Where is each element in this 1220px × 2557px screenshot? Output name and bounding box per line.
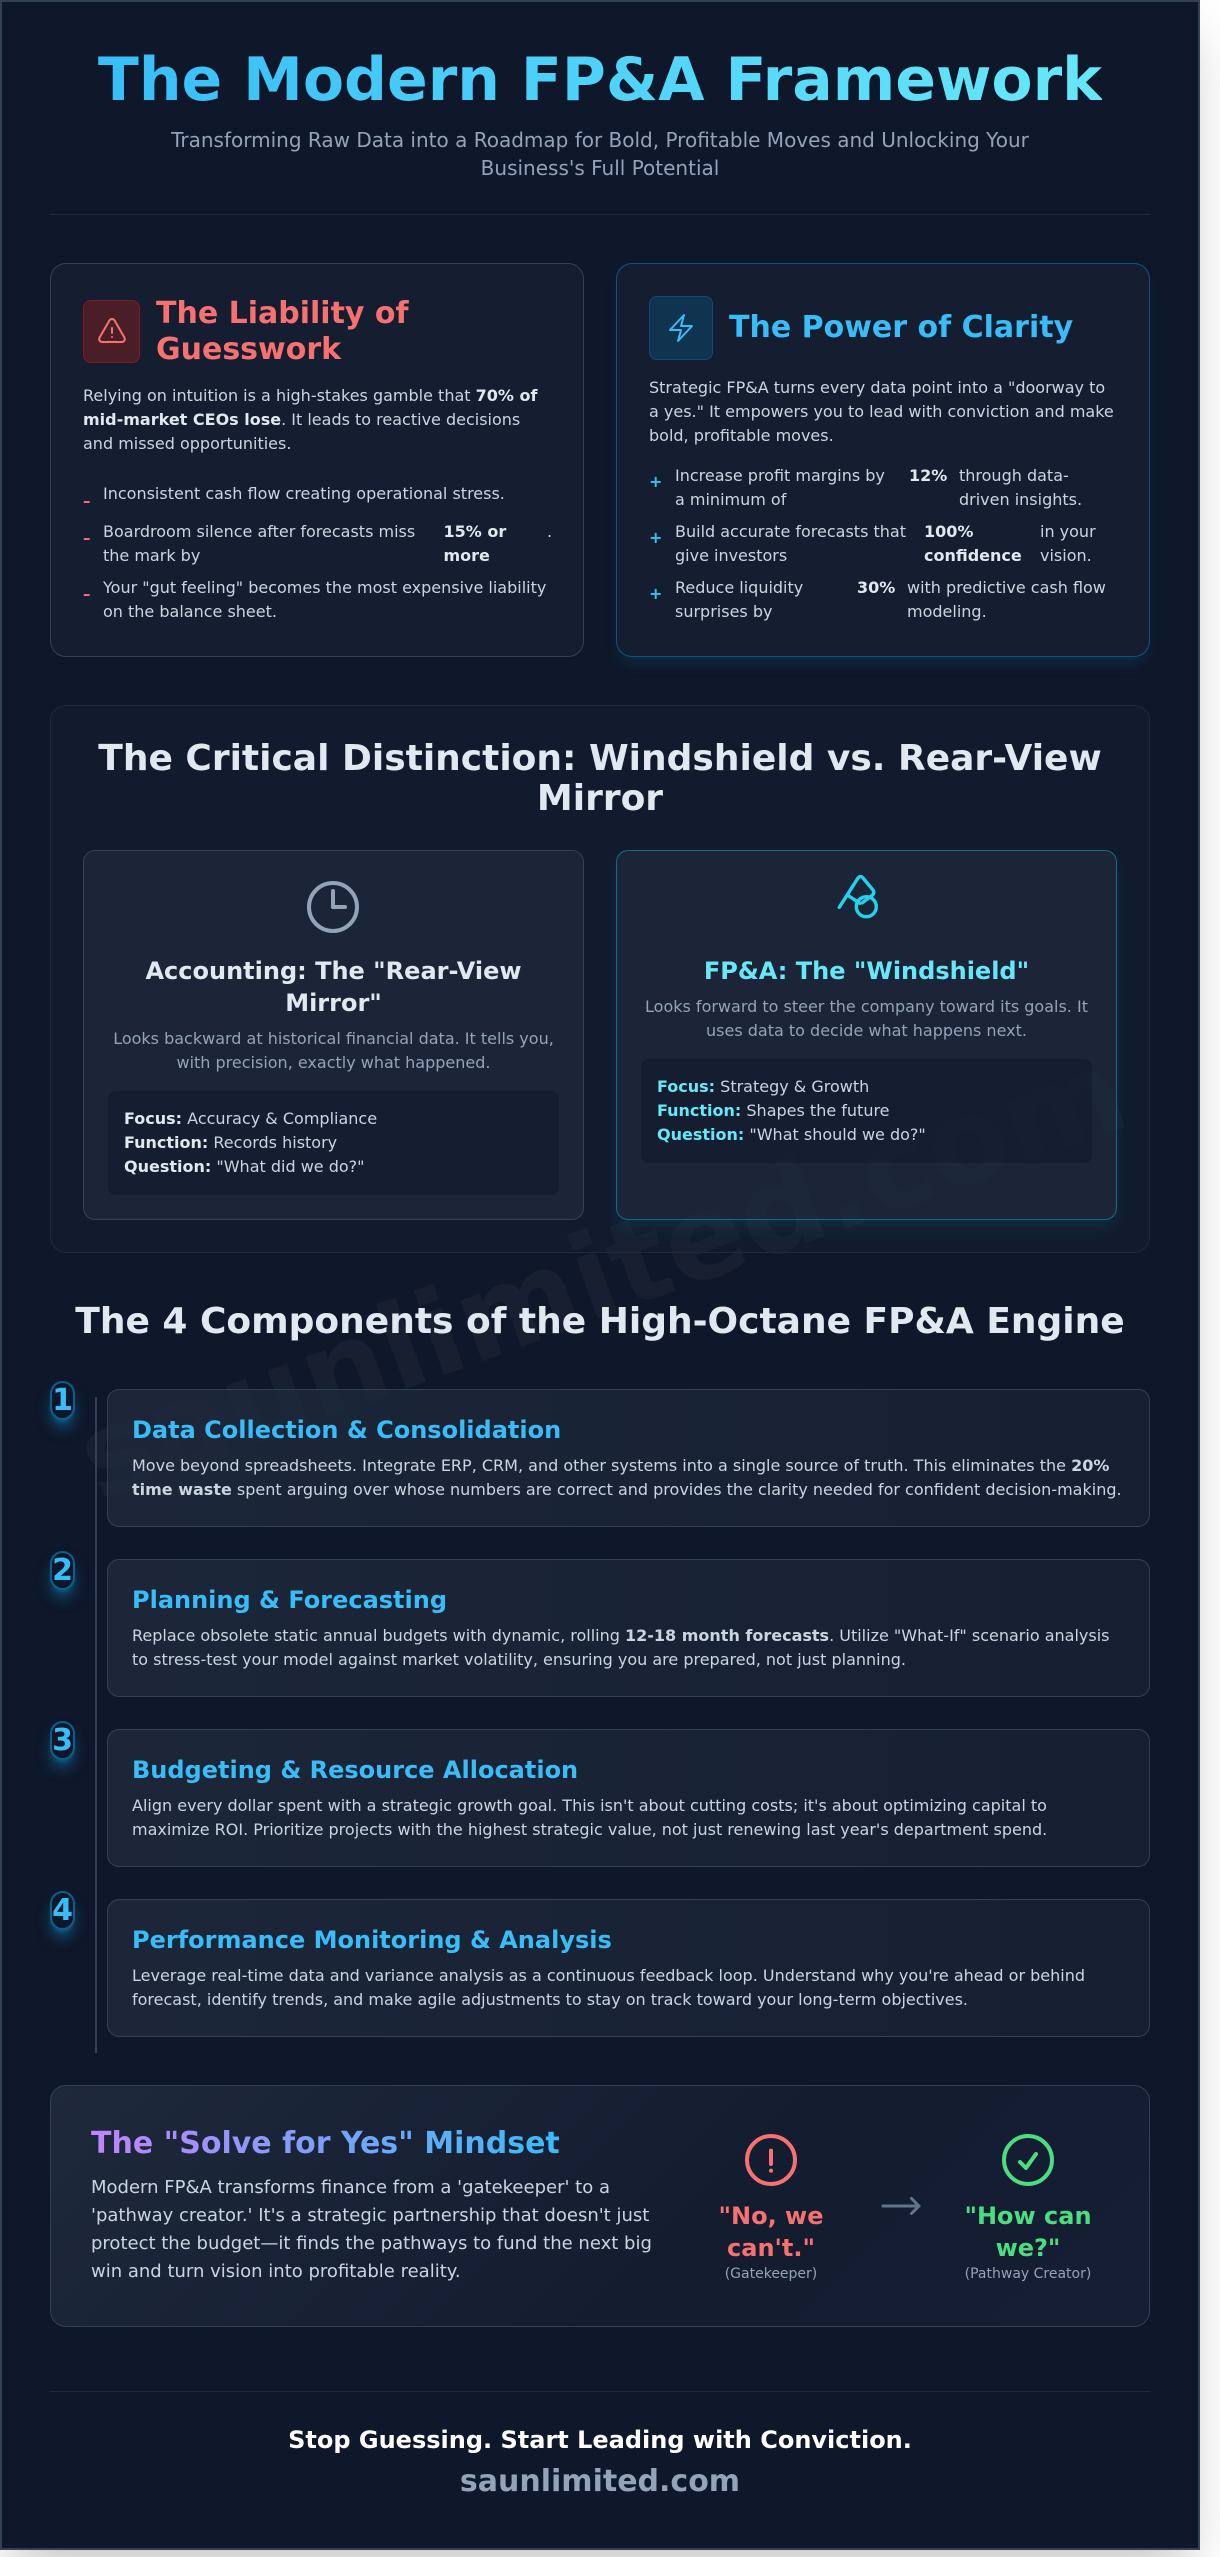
list item 1: Inconsistent cash flow creating operational stress.	[103, 484, 505, 503]
arrow	[882, 2196, 920, 2215]
panel: the liability of guesswork	[50, 263, 584, 657]
details box	[108, 1091, 559, 1195]
heading: the 4 components: The 4 Components of the High-Octane FP&A Engine	[75, 1301, 1125, 1342]
list item 2: give investors	[675, 546, 787, 565]
description	[91, 2177, 652, 2282]
card heading: Accounting: The "Rear-View	[145, 957, 522, 985]
badge 2: 2	[52, 1553, 73, 1588]
card description: uses data to decide what happens next.	[706, 1021, 1027, 1040]
component title: Planning & Forecasting	[132, 1586, 447, 1614]
quote: "No, we	[718, 2202, 824, 2230]
list item 2: Build accurate forecasts that	[675, 522, 906, 541]
component 4	[107, 1899, 1150, 2037]
heading: The Power of Clarity	[729, 310, 1073, 345]
component text: Replace obsolete static annual budgets with dynamic, rolling 12-18 month forecasts. Utilize "What-If" scenario analysis	[132, 1626, 1109, 1645]
component text: forecast, identify trends, and make agile adjustments to stay on track toward your long-term objectives.	[132, 1990, 968, 2009]
timeline line	[95, 1397, 97, 2053]
component text: Move beyond spreadsheets. Integrate ERP, CRM, and other systems into a single source of truth. This eliminates the 20%	[132, 1456, 1109, 1475]
icon: check circle	[1002, 2134, 1054, 2186]
heading	[156, 296, 409, 367]
panel: the critical distinction	[50, 705, 1150, 1253]
intro text: Relying on intuition is a high-stakes gamble that 70% of	[83, 386, 537, 405]
card heading: FP&A: The "Windshield"	[704, 957, 1029, 985]
footer tagline: Stop Guessing. Start Leading with Conviction.	[288, 2426, 912, 2454]
icon: clock	[307, 881, 359, 933]
heading: Guesswork	[156, 332, 341, 367]
intro text	[649, 378, 1114, 445]
intro text: bold, profitable moves.	[649, 426, 834, 445]
details box: Focus: Accuracy & Compliance	[124, 1109, 377, 1128]
component text: maximize ROI. Prioritize projects with the highest strategic value, not just renewing last year's department spend.	[132, 1820, 1047, 1839]
list item 1: –	[83, 492, 90, 510]
card heading	[145, 957, 522, 1017]
card: accounting	[83, 850, 584, 1220]
list item 2: –	[83, 529, 90, 547]
list item 3: surprises by	[675, 602, 772, 621]
list item 1: +	[649, 472, 662, 491]
list item 2: +	[649, 528, 662, 547]
footer website: saunlimited.com	[460, 2464, 740, 2499]
list item 3: modeling.	[907, 602, 987, 621]
description: Modern FP&A transforms finance from a 'gatekeeper' to a	[91, 2177, 610, 2198]
card description	[645, 997, 1088, 1040]
card description: with precision, exactly what happened.	[176, 1053, 490, 1072]
component text	[132, 1456, 1122, 1499]
list item 2	[83, 522, 552, 565]
list item 1: Increase profit margins by	[675, 466, 885, 485]
component 2	[107, 1559, 1150, 1697]
list item 1: driven insights.	[959, 490, 1082, 509]
intro text: Strategic FP&A turns every data point into a "doorway to	[649, 378, 1105, 397]
subtitle	[171, 128, 1029, 180]
component title: Budgeting & Resource Allocation	[132, 1756, 578, 1784]
badge 3: 3	[52, 1723, 73, 1758]
heading: The "Solve for Yes" Mindset	[91, 2126, 560, 2161]
list item 2: the mark by	[103, 546, 200, 565]
component text	[132, 1796, 1047, 1839]
quote: "How can	[964, 2202, 1092, 2230]
component title: Data Collection & Consolidation	[132, 1416, 561, 1444]
component text	[132, 1626, 1109, 1669]
heading: The Critical Distinction: Windshield vs. Rear-View	[98, 738, 1102, 779]
list item 2: Boardroom silence after forecasts miss	[103, 522, 415, 541]
title: The Modern FP&A Framework	[98, 45, 1102, 115]
icon: lightning bolt	[649, 296, 713, 360]
details box: Function: Records history	[124, 1133, 337, 1152]
list item 2: in your	[1040, 522, 1096, 541]
subtitle: Business's Full Potential	[481, 156, 719, 180]
card: fp&a	[616, 850, 1117, 1220]
description: protect the budget—it finds the pathways to fund the next big	[91, 2233, 652, 2254]
component 1	[107, 1389, 1150, 1527]
intro text	[83, 386, 538, 453]
card heading: Mirror"	[285, 989, 382, 1017]
list item 1	[649, 466, 1082, 509]
list item 1	[83, 484, 505, 510]
caption: (Gatekeeper)	[725, 2266, 817, 2282]
quote	[964, 2202, 1092, 2262]
badge 4: 4	[52, 1893, 73, 1928]
quote: can't."	[727, 2234, 815, 2262]
list item 3	[649, 578, 1106, 621]
intro text: a yes." It empowers you to lead with conviction and make	[649, 402, 1114, 421]
subtitle: Transforming Raw Data into a Roadmap for Bold, Profitable Moves and Unlocking Your	[171, 128, 1029, 152]
badge 1: 1	[52, 1383, 73, 1418]
list item 3: 30%	[857, 578, 895, 597]
panel: the power of clarity	[616, 263, 1150, 657]
list item 3: Your "gut feeling" becomes the most expensive liability	[103, 578, 546, 597]
icon: warning triangle	[83, 300, 140, 363]
list item 3	[83, 578, 546, 621]
quote: we?"	[996, 2234, 1060, 2262]
list item 2: vision.	[1040, 546, 1092, 565]
component text	[132, 1966, 1085, 2009]
heading	[98, 738, 1102, 819]
list item 1: through data-	[959, 466, 1069, 485]
list item 2: confidence	[924, 546, 1022, 565]
description: 'pathway creator.' It's a strategic partnership that doesn't just	[91, 2205, 649, 2226]
list item 3: –	[83, 585, 90, 603]
watermark: saunlimited.com	[61, 1021, 1143, 1527]
card description: Looks forward to steer the company toward its goals. It	[645, 997, 1088, 1016]
description: win and turn vision into profitable reality.	[91, 2261, 461, 2282]
component text: Leverage real-time data and variance analysis as a continuous feedback loop. Understand why you're ahead or behind	[132, 1966, 1085, 1985]
list item 2: 15% or	[444, 522, 506, 541]
caption: (Pathway Creator)	[965, 2266, 1091, 2282]
heading: Mirror	[537, 778, 663, 819]
quote	[718, 2202, 824, 2262]
component 3	[107, 1729, 1150, 1867]
icon: exclamation circle	[745, 2134, 797, 2186]
list item 2	[649, 522, 1096, 565]
panel: solve for yes mindset	[50, 2085, 1150, 2327]
intro text: and missed opportunities.	[83, 434, 291, 453]
component text: to stress-test your model against market volatility, ensuring you are prepared, not just planning.	[132, 1650, 906, 1669]
card description	[113, 1029, 554, 1072]
details box: Question: "What did we do?"	[124, 1157, 365, 1176]
component text: time waste spent arguing over whose numbers are correct and provides the clarity needed for confident decision-making.	[132, 1480, 1122, 1499]
pathway creator column	[964, 2134, 1092, 2282]
component text: Align every dollar spent with a strategic growth goal. This isn't about cutting costs; it's about optimizing capital to	[132, 1796, 1047, 1815]
list item 2: .	[547, 522, 552, 541]
list item 3: +	[649, 584, 662, 603]
heading: The Liability of	[156, 296, 409, 331]
details box: Focus: Strategy & Growth	[657, 1077, 869, 1096]
list item 1: 12%	[909, 466, 947, 485]
list item 3: with predictive cash flow	[907, 578, 1106, 597]
gatekeeper column	[718, 2134, 824, 2282]
list item 3: on the balance sheet.	[103, 602, 277, 621]
list item 1: a minimum of	[675, 490, 786, 509]
details box	[641, 1059, 1092, 1163]
card description: Looks backward at historical financial data. It tells you,	[113, 1029, 554, 1048]
list item 3: Reduce liquidity	[675, 578, 803, 597]
details box: Question: "What should we do?"	[657, 1125, 926, 1144]
list item 2: more	[444, 546, 490, 565]
details box: Function: Shapes the future	[657, 1101, 890, 1120]
intro text: mid-market CEOs lose. It leads to reactive decisions	[83, 410, 520, 429]
component title: Performance Monitoring & Analysis	[132, 1926, 612, 1954]
list item 2: 100%	[924, 522, 973, 541]
icon: windshield	[838, 875, 878, 918]
